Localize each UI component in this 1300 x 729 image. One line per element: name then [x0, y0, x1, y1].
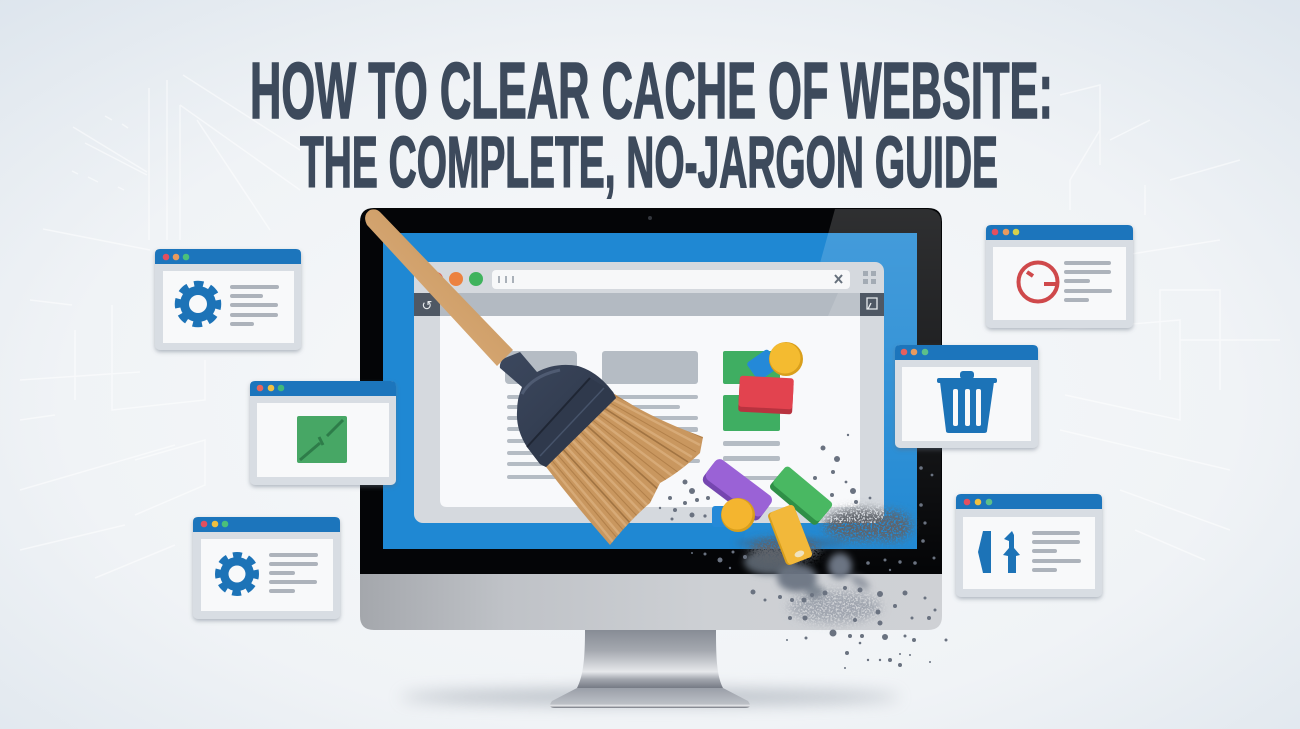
title — [250, 46, 1053, 203]
icon: clock — [1018, 262, 1058, 302]
broom handle — [365, 209, 513, 366]
icon: gear — [178, 284, 218, 324]
toolbar icons: ↺ — [422, 299, 432, 314]
address bar — [492, 270, 850, 289]
screen — [383, 233, 917, 549]
toolbar — [414, 293, 884, 316]
yellow circle top — [769, 342, 803, 376]
icon: gear — [218, 555, 256, 593]
webcam — [648, 216, 652, 220]
window: trash — [895, 345, 1038, 448]
window: gear bottom left — [193, 517, 340, 619]
monitor chin — [360, 574, 942, 630]
dust cloud — [659, 434, 948, 669]
scattered cache blocks — [700, 457, 834, 566]
screen glare — [735, 209, 941, 570]
green block — [768, 465, 834, 526]
browser window — [414, 262, 884, 523]
grid icon — [863, 271, 876, 284]
window: arrows — [956, 494, 1102, 597]
purple block — [700, 457, 774, 523]
window: gear top left — [155, 249, 301, 350]
icon: green square — [297, 416, 347, 463]
icon: arrows — [978, 531, 1020, 573]
blue block top — [746, 349, 780, 381]
dust particles — [659, 434, 948, 669]
yellow circle bottom — [721, 498, 755, 532]
broom bristles — [543, 393, 703, 545]
yellow block — [767, 504, 813, 566]
monitor stand and shadow — [400, 630, 900, 708]
blue block bottom — [712, 506, 736, 527]
cache blocks on page — [738, 342, 803, 414]
monitor — [360, 208, 942, 630]
dust solid streams — [735, 538, 872, 599]
broom head — [500, 352, 616, 467]
window dots — [429, 272, 443, 286]
page — [440, 316, 860, 507]
icon: trash can — [937, 371, 997, 433]
red block — [738, 376, 794, 414]
window: clock — [986, 225, 1133, 328]
broom — [365, 209, 703, 545]
page text lines — [507, 395, 780, 480]
page placeholder boxes — [505, 351, 577, 384]
monitor body — [360, 208, 942, 574]
window: green image — [250, 381, 396, 485]
dust speckle clouds — [750, 509, 912, 623]
